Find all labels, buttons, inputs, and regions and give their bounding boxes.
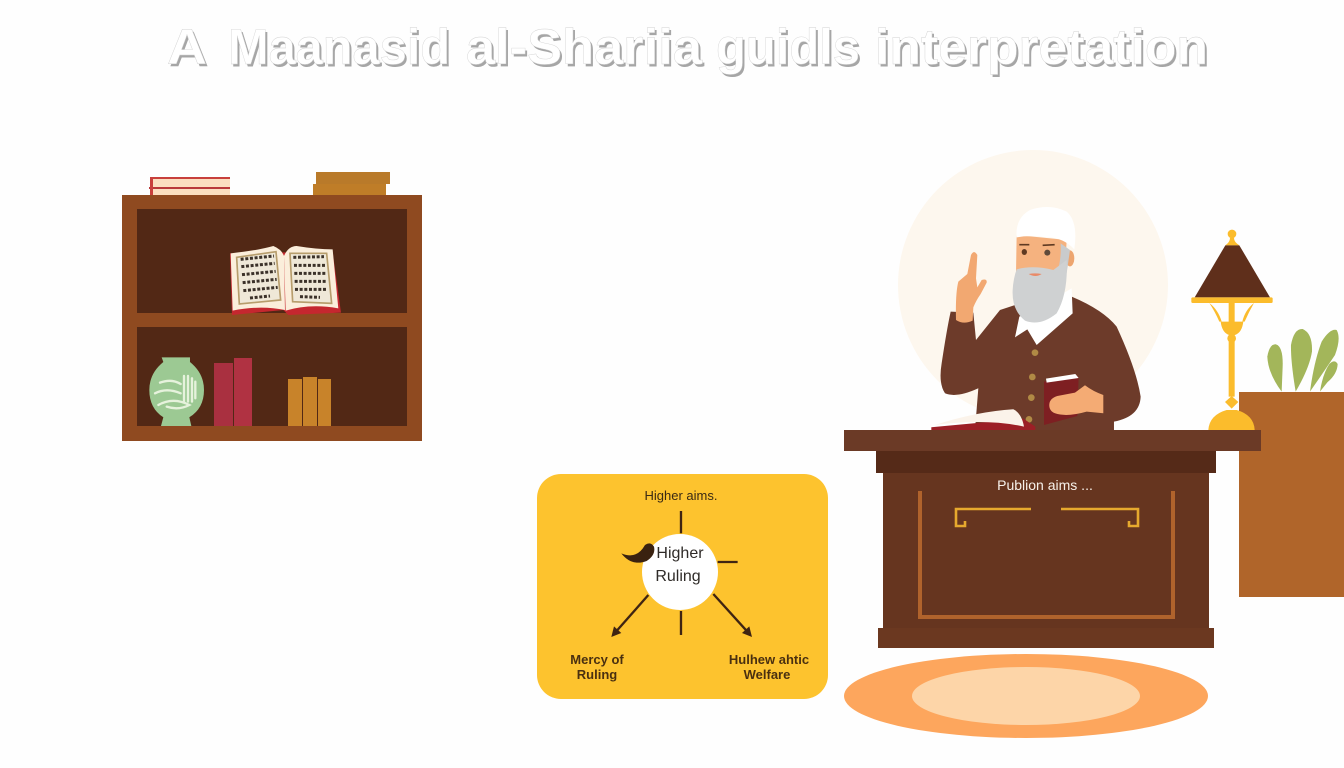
plant bbox=[1267, 329, 1339, 392]
right label: Welfare bbox=[744, 667, 790, 682]
lectern neck bbox=[876, 451, 1216, 473]
lectern body bbox=[883, 473, 1209, 629]
gold bracket right bbox=[1061, 509, 1138, 526]
title: guidls bbox=[718, 22, 862, 78]
robe bbox=[941, 297, 1141, 430]
title: interpretation bbox=[875, 19, 1208, 75]
title: guidls bbox=[716, 19, 860, 75]
right label bbox=[729, 652, 809, 682]
orange books bbox=[288, 377, 331, 426]
hair bbox=[1057, 243, 1070, 273]
beard bbox=[1013, 260, 1067, 323]
title: interpretation bbox=[877, 22, 1210, 78]
open book on desk bbox=[931, 409, 1035, 431]
scholar figure bbox=[931, 207, 1141, 431]
red books bbox=[214, 358, 252, 426]
open book bbox=[230, 246, 341, 315]
left label bbox=[570, 652, 624, 682]
collar bbox=[1015, 288, 1073, 345]
rug bbox=[844, 654, 1208, 738]
eyes and brows bbox=[1019, 245, 1055, 256]
shelf upper compartment bbox=[137, 209, 407, 313]
held book bbox=[1044, 374, 1079, 425]
lectern panel outline bbox=[920, 491, 1173, 617]
right label: Hulhew ahtic bbox=[729, 652, 809, 667]
lectern base bbox=[878, 628, 1214, 648]
title: Maanasid bbox=[230, 22, 452, 78]
gold bracket left bbox=[956, 509, 1031, 526]
lamp finial bbox=[1225, 230, 1239, 245]
central label bbox=[655, 545, 704, 585]
shelf lower compartment bbox=[137, 327, 407, 426]
title: Maanasid bbox=[228, 19, 450, 75]
title: A bbox=[169, 22, 209, 78]
books on top of shelf, left bbox=[149, 177, 230, 195]
face bbox=[1016, 235, 1067, 273]
lectern bbox=[844, 430, 1261, 648]
shelf frame bbox=[122, 195, 422, 441]
books on top of shelf, right bbox=[313, 172, 390, 195]
bookshelf bbox=[122, 172, 422, 441]
lectern label: Publion aims ... bbox=[997, 477, 1093, 493]
buttons bbox=[1026, 349, 1038, 423]
green vase bbox=[149, 357, 204, 426]
card background bbox=[537, 474, 828, 699]
side cabinet bbox=[1239, 392, 1344, 597]
connectors and arrows bbox=[611, 511, 752, 637]
turban bbox=[1016, 207, 1075, 249]
halo behind scholar bbox=[898, 150, 1168, 420]
title: al-Shariia bbox=[468, 22, 705, 78]
ear bbox=[1066, 250, 1074, 266]
left label: Ruling bbox=[577, 667, 617, 682]
title bbox=[167, 19, 1210, 78]
top label: Higher aims. bbox=[645, 488, 717, 503]
holding hand bbox=[1049, 385, 1103, 415]
diagram card bbox=[537, 474, 828, 699]
central circle bbox=[642, 534, 718, 610]
lamp stand bbox=[1191, 297, 1273, 430]
left label: Mercy of bbox=[570, 652, 624, 667]
lamp bbox=[1191, 230, 1273, 430]
title: A bbox=[167, 19, 207, 75]
raised hand bbox=[956, 252, 987, 323]
central label: Ruling bbox=[655, 568, 701, 585]
lectern top bbox=[844, 430, 1261, 451]
lamp shade bbox=[1195, 245, 1270, 297]
horn icon bbox=[621, 543, 654, 563]
title: al-Shariia bbox=[466, 19, 703, 75]
central label: Higher bbox=[656, 545, 704, 562]
mouth bbox=[1029, 273, 1042, 276]
